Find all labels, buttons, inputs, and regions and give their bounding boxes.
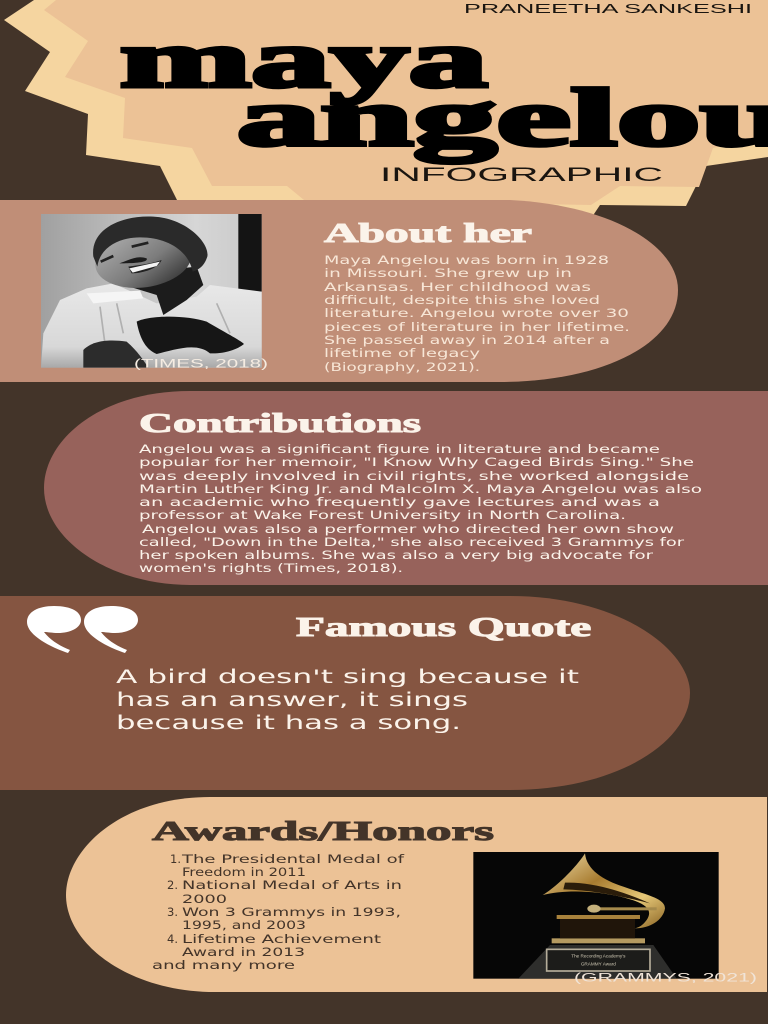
header sunburst shape (4, 0, 768, 220)
text block: contributions: Angelou was also a performer who directed her own show (142, 522, 674, 536)
text block: contributions: called, "Down in the Delta," she also received 3 Grammys for (139, 535, 684, 549)
awards list: National Medal of Arts in (182, 878, 402, 892)
quote text: because it has a song. (116, 713, 461, 734)
text block: about her: in Missouri. She grew up in (324, 266, 572, 280)
heading: contributions: Contributions (139, 408, 421, 438)
awards list: and many more (152, 958, 295, 972)
heading: awards: Awards/Honors (152, 816, 494, 846)
heading: famous quote: Famous Quote (296, 612, 591, 642)
photo: Grammy award: The Recording Academy's (571, 953, 626, 958)
text block: about her: difficult, despite this she loved (324, 293, 600, 307)
awards list: 1. (170, 852, 181, 866)
text block: contributions: was deeply involved in civil rights, she worked alongside (139, 469, 689, 483)
awards list: Award in 2013 (182, 945, 305, 959)
text block: about her: Maya Angelou was born in 1928 (324, 253, 609, 267)
awards list: 4. (167, 932, 178, 946)
text block: contributions: women's rights (Times, 2018). (139, 561, 403, 575)
photo: Grammy award (473, 852, 757, 984)
awards list: 2000 (182, 892, 227, 906)
text block: about her: (Biography, 2021). (324, 360, 480, 374)
awards list: Won 3 Grammys in 1993, (182, 905, 401, 919)
icon: quotation marks (27, 606, 138, 653)
quote text: has an answer, it sings (116, 690, 468, 711)
title (120, 14, 768, 163)
title: maya (120, 14, 488, 105)
quote text (116, 667, 579, 734)
photo: Maya Angelou portrait (41, 214, 268, 371)
text block: about her: She passed away in 2014 after a (324, 333, 610, 347)
text block: about her: lifetime of legacy (324, 346, 480, 360)
awards list (152, 852, 405, 972)
text block: contributions: popular for her memoir, "I Know Why Caged Birds Sing." She (139, 455, 694, 469)
heading: about her: About her (324, 218, 532, 248)
quote text: A bird doesn't sing because it (116, 667, 579, 688)
text block: contributions: Angelou was a significant figure in literature and became (139, 442, 660, 456)
photo: Grammy award: GRAMMY Award (581, 961, 616, 966)
awards list: Lifetime Achievement (182, 932, 382, 946)
panel: famous quote (0, 596, 690, 790)
photo credit: (GRAMMYS, 2021) (574, 970, 757, 984)
subtitle: INFOGRAPHIC (380, 164, 663, 186)
awards list: 2. (167, 878, 178, 892)
text block: contributions: Martin Luther King Jr. and Malcolm X. Maya Angelou was also (139, 482, 702, 496)
author name: PRANEETHA SANKESHI (464, 1, 752, 16)
panel: contributions (44, 391, 768, 585)
awards list: 3. (167, 905, 178, 919)
awards list: The Presidental Medal of (180, 852, 405, 866)
awards list: 1995, and 2003 (182, 918, 306, 932)
panel: about her (0, 200, 678, 382)
panel: awards and honors (66, 797, 767, 992)
awards list: Freedom in 2011 (182, 865, 306, 879)
text block: contributions (139, 442, 702, 575)
photo credit: (TIMES, 2018) (134, 357, 268, 371)
text block: contributions: professor at Wake Forest University in North Carolina. (139, 508, 626, 522)
text block: contributions: an academic who frequently gave lectures and was a (139, 495, 660, 509)
text block: about her (324, 253, 630, 374)
text block: about her: literature. Angelou wrote over 30 (324, 306, 629, 320)
text block: about her: Arkansas. Her childhood was (324, 280, 591, 294)
text block: about her: pieces of literature in her lifetime. (324, 320, 630, 334)
text block: contributions: her spoken albums. She was also a very big advocate for (139, 548, 653, 562)
